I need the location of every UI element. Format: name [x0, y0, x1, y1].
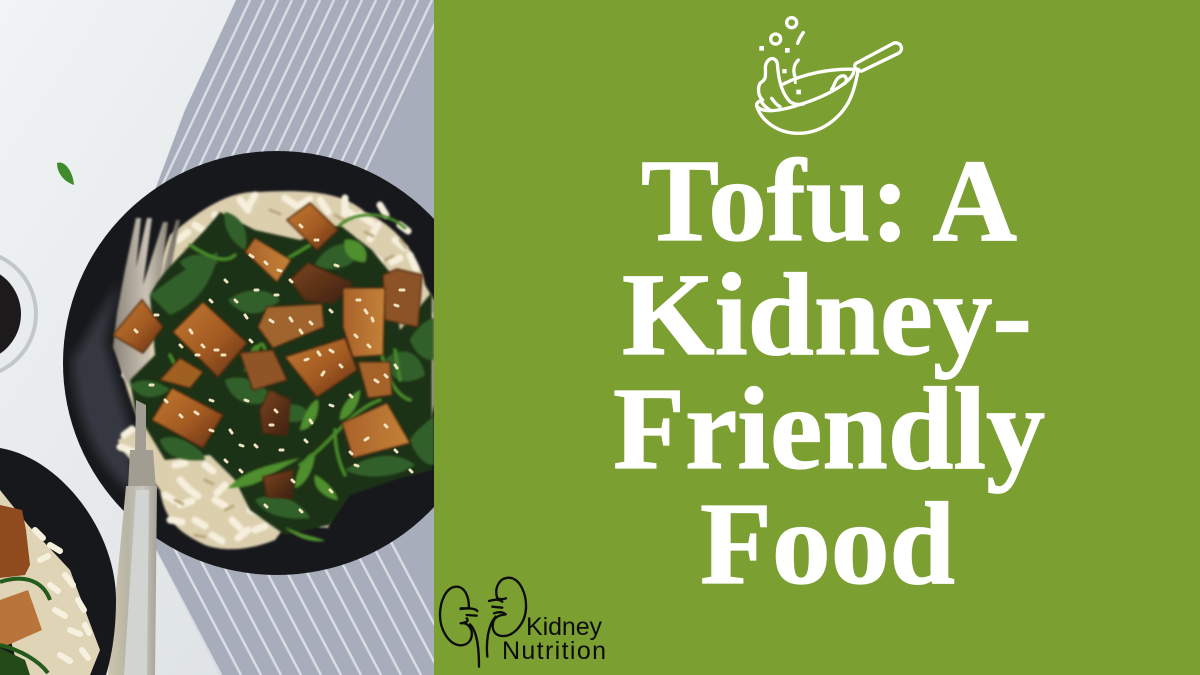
tofu cube back behind others [358, 362, 392, 398]
arc accents [794, 33, 803, 78]
main plate [63, 151, 434, 575]
food splash [759, 59, 803, 104]
rice layer [118, 191, 434, 549]
fork handle highlight [124, 490, 149, 675]
sauce bowl [0, 249, 38, 379]
title line 1: Tofu: A [641, 135, 1017, 266]
logo wordmark Nutrition: Nutrition [502, 637, 606, 665]
icon: wok with tossed food [757, 18, 901, 133]
striped towel [156, 0, 434, 675]
flying bits [759, 46, 801, 94]
logo: Kidney Nutrition [440, 578, 606, 667]
wok rim [757, 69, 854, 111]
logo wordmark Kidney: Kidney [526, 613, 602, 641]
title line 2: Kidney- [622, 249, 1032, 380]
inner strokes [761, 98, 780, 110]
tofu on second plate [0, 505, 30, 578]
fork head and tines [113, 218, 180, 405]
photo: tofu rice bowl on table [0, 0, 434, 675]
flying ring small [771, 34, 781, 44]
icon: two kidneys [440, 578, 526, 667]
greens on second plate [0, 579, 50, 673]
tofu cubes [113, 203, 422, 498]
flying ring large [787, 18, 797, 28]
panel: green background [434, 0, 1200, 675]
rice on second plate [0, 490, 100, 675]
second plate [0, 448, 116, 675]
wok handle [855, 43, 901, 71]
stray herb leaf [57, 163, 74, 185]
fork handle [108, 486, 157, 675]
fork neck [128, 400, 156, 488]
title [613, 135, 1045, 609]
sesame seeds [135, 225, 412, 512]
greens [130, 212, 434, 541]
title line 4: Food [700, 478, 955, 609]
right blob [832, 76, 846, 89]
plate sheen [72, 280, 135, 495]
title line 3: Friendly [613, 363, 1045, 494]
wok bowl [757, 69, 858, 133]
table surface [0, 0, 236, 675]
